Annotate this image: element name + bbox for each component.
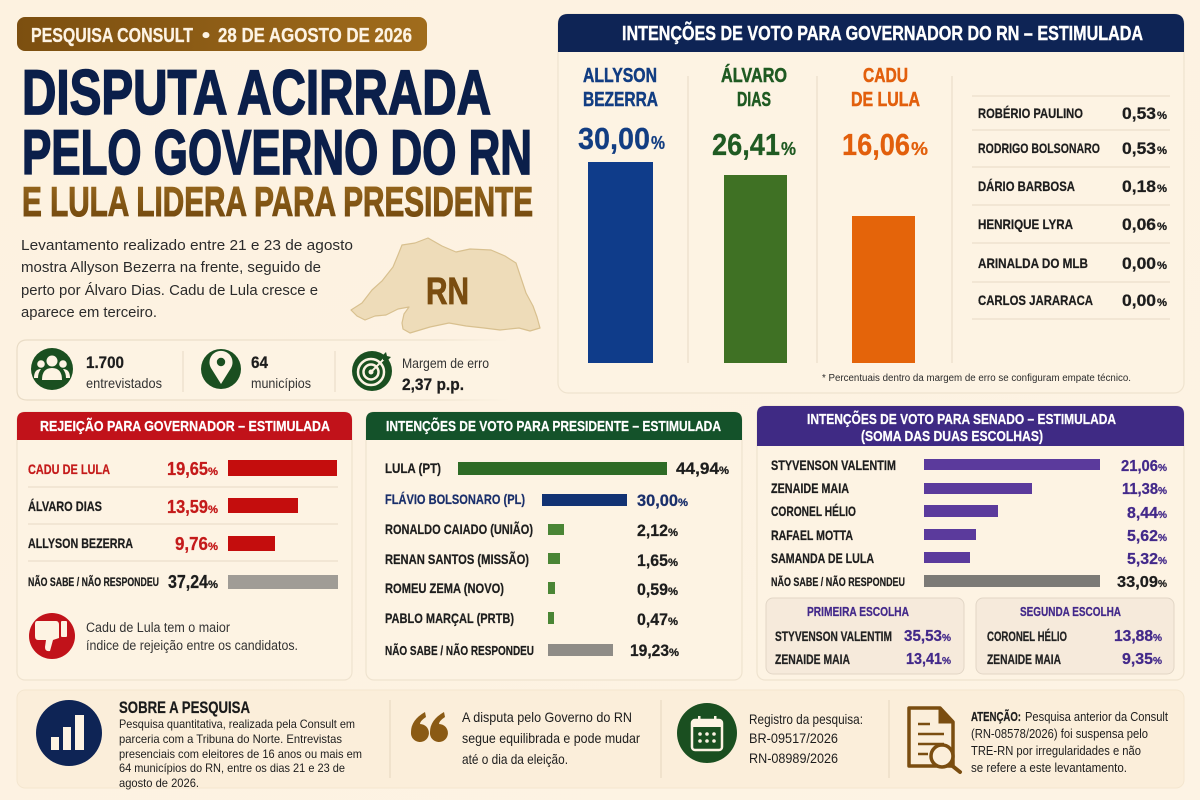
other candidates list: HENRIQUE LYRA (978, 216, 1073, 232)
heading (17, 412, 352, 440)
candidate: Allyson Bezerra: % (651, 133, 665, 153)
row: Allyson Bezerra: ALLYSON BEZERRA (28, 535, 133, 551)
intro text: mostra Allyson Bezerra na frente, seguido de (21, 259, 321, 276)
other candidates list: % (1157, 183, 1167, 195)
row: Flavio Bolsonaro: % (678, 497, 688, 509)
row: Rafael Motta: RAFAEL MOTTA (771, 527, 853, 543)
candidate: Cadu de Lula: CADU (863, 65, 908, 87)
card: second choice: 13,88 (1114, 628, 1153, 645)
row: no answer: % (669, 647, 679, 659)
row: no answer: % (208, 579, 218, 591)
title: E LULA LIDERA PARA PRESIDENTE (22, 178, 533, 225)
row: Samanda de Lula: SAMANDA DE LULA (771, 550, 874, 566)
intro text: perto por Álvaro Dias. Cadu de Lula cresce e (21, 282, 318, 299)
warning note: ATENÇÃO: (971, 709, 1021, 724)
card: second choice: 9,35 (1122, 651, 1153, 668)
other candidates list: % (1157, 297, 1167, 309)
row: Cadu de Lula: CADU DE LULA (28, 461, 110, 477)
icon: bar chart (36, 700, 102, 766)
row: Styvenson Valentim: 21,06 (1121, 458, 1158, 475)
row: Lula: % (719, 465, 729, 477)
card: first choice: PRIMEIRA ESCOLHA (807, 604, 909, 619)
row: Rafael Motta: 5,62 (1127, 528, 1158, 545)
card: second choice: CORONEL HÉLIO (987, 629, 1067, 644)
title: PELO GOVERNO DO RN (22, 118, 532, 188)
row: Zenaide Maia: ZENAIDE MAIA (771, 480, 849, 496)
quote: segue equilibrada e pode mudar (462, 730, 640, 746)
panel: rejection for governor (17, 412, 352, 680)
intro text: aparece em terceiro. (21, 304, 157, 321)
quote: A disputa pelo Governo do RN (462, 709, 632, 725)
footer panel (17, 690, 1184, 790)
row: no answer: 33,09 (1117, 574, 1158, 591)
card: first choice: STYVENSON VALENTIM (775, 629, 892, 644)
date badge: PESQUISA CONSULT (31, 25, 193, 47)
about the survey: 64 municípios do RN, entre os dias 21 e 23 de (119, 761, 345, 775)
row: no answer: NÃO SABE / NÃO RESPONDEU (771, 574, 905, 589)
row: no answer: 37,24 (168, 572, 208, 592)
row: Lula (385, 459, 729, 478)
card: first choice: % (942, 656, 951, 667)
date badge: 28 DE AGOSTO DE 2026 (218, 25, 412, 47)
row: Lula: LULA (PT) (385, 460, 441, 476)
row: Alvaro Dias (28, 497, 298, 517)
candidate: Alvaro Dias: ÁLVARO (721, 64, 787, 87)
card: second choice: ZENAIDE MAIA (987, 652, 1061, 667)
row: Romeu Zema: % (668, 586, 678, 598)
row: Renan Santos: % (668, 557, 678, 569)
heading (757, 406, 1184, 446)
stat: municipalities: 64 (251, 353, 268, 372)
row: Alvaro Dias: % (208, 504, 218, 516)
row: Pablo Marcal: % (668, 616, 678, 628)
row: Rafael Motta (771, 527, 1167, 545)
icon: target (352, 351, 392, 391)
row: Cadu de Lula: % (208, 466, 218, 478)
heading: INTENÇÕES DE VOTO PARA PRESIDENTE – ESTIMULADA (386, 417, 721, 435)
warning note: TRE-RN por irregularidades e não (971, 744, 1141, 758)
row: Samanda de Lula: 5,32 (1127, 551, 1158, 568)
quote (462, 709, 640, 767)
row: Alvaro Dias: ÁLVARO DIAS (28, 498, 102, 514)
panel: senate voting intentions (757, 406, 1184, 680)
candidate: Cadu de Lula: % (911, 139, 928, 159)
card: second choice: % (1153, 633, 1162, 644)
row: Ronaldo Caiado: 2,12 (637, 521, 668, 540)
row: Pablo Marcal: 0,47 (637, 610, 668, 629)
row: Coronel Helio: % (1158, 510, 1167, 521)
row: Renan Santos (385, 550, 678, 570)
title: DISPUTA ACIRRADA (22, 58, 491, 128)
card: first choice: 35,53 (904, 628, 942, 645)
row: Flavio Bolsonaro: FLÁVIO BOLSONARO (PL) (385, 491, 525, 507)
map: Rio Grande do Norte: RN (426, 271, 469, 313)
row: Flavio Bolsonaro: 30,00 (637, 491, 678, 510)
other candidates list: 0,00 (1122, 291, 1156, 310)
row: no answer: % (1158, 579, 1167, 590)
row: Pablo Marcal: PABLO MARÇAL (PRTB) (385, 610, 514, 626)
candidate: Alvaro Dias (712, 64, 796, 363)
row: no answer: NÃO SABE / NÃO RESPONDEU (28, 576, 159, 589)
row: Renan Santos: RENAN SANTOS (MISSÃO) (385, 550, 529, 567)
candidate: Alvaro Dias: % (781, 139, 796, 159)
candidate: Alvaro Dias: 26,41 (712, 127, 780, 162)
row: Styvenson Valentim: % (1158, 463, 1167, 474)
other candidates list: DÁRIO BARBOSA (978, 178, 1075, 194)
other candidates list: 0,18 (1122, 177, 1156, 196)
candidate: Cadu de Lula: 16,06 (842, 127, 910, 162)
date badge: • (202, 25, 210, 47)
candidate: Allyson Bezerra: 30,00 (578, 121, 650, 156)
warning note: (RN-08578/2026) foi suspensa pelo (971, 727, 1148, 741)
card: second choice: SEGUNDA ESCOLHA (1020, 604, 1121, 619)
about the survey: SOBRE A PESQUISA (119, 698, 250, 717)
stat: municipalities (251, 353, 311, 391)
card: second choice: % (1153, 656, 1162, 667)
other candidates list: ROBÉRIO PAULINO (978, 105, 1083, 121)
rejection note (86, 620, 298, 653)
row: Coronel Helio (771, 503, 1167, 522)
about the survey (119, 698, 362, 790)
icon: thumbs down (29, 613, 75, 659)
candidate: Allyson Bezerra: BEZERRA (583, 89, 658, 111)
row: Alvaro Dias: 13,59 (167, 497, 208, 517)
other candidates list: CARLOS JARARACA (978, 292, 1093, 308)
row: Cadu de Lula: 19,65 (167, 459, 208, 479)
heading (366, 412, 742, 440)
about the survey: parceria com a Tribuna do Norte. Entrevistas (119, 732, 342, 746)
icon: calendar (677, 703, 737, 763)
icon: quotation mark (411, 712, 448, 742)
row: Lula: 44,94 (676, 459, 720, 478)
intro text (21, 237, 353, 321)
heading: REJEIÇÃO PARA GOVERNADOR – ESTIMULADA (40, 417, 330, 435)
warning note: se refere a este levantamento. (971, 761, 1127, 775)
stat: interviewees: entrevistados (86, 375, 162, 391)
heading: (SOMA DAS DUAS ESCOLHAS) (861, 428, 1043, 445)
icon: document with magnifier (909, 708, 960, 772)
candidate: Cadu de Lula: DE LULA (851, 89, 920, 111)
other candidates list: % (1157, 110, 1167, 122)
card: first choice (766, 598, 964, 674)
about the survey: agosto de 2026. (119, 776, 199, 790)
title (22, 58, 533, 225)
rejection note: Cadu de Lula tem o maior (86, 620, 230, 635)
row: Allyson Bezerra: 9,76 (175, 534, 208, 554)
quote: até o dia da eleição. (462, 751, 568, 767)
stat: interviewees: 1.700 (86, 353, 124, 372)
stat: municipalities: municípios (251, 375, 311, 391)
survey registration: BR-09517/2026 (749, 730, 838, 746)
other candidates list: RODRIGO BOLSONARO (978, 140, 1100, 156)
candidate: Allyson Bezerra (578, 65, 665, 363)
row: Zenaide Maia (771, 480, 1167, 498)
row: Allyson Bezerra (28, 534, 275, 554)
row: Ronaldo Caiado (385, 520, 678, 540)
other candidates list: 0,00 (1122, 254, 1156, 273)
icon: people (31, 348, 73, 390)
footnote: * Percentuais dentro da margem de erro se configuram empate técnico. (822, 373, 1131, 384)
icon: map pin (201, 349, 241, 389)
candidate: Cadu de Lula (842, 65, 928, 363)
row: Coronel Helio: 8,44 (1127, 505, 1158, 522)
other candidates list (972, 96, 1170, 319)
row: no answer (385, 641, 679, 660)
row: Cadu de Lula (28, 459, 337, 479)
stat: margin of error: Margem de erro (402, 355, 489, 371)
intro text: Levantamento realizado entre 21 e 23 de agosto (21, 237, 353, 254)
row: Samanda de Lula: % (1158, 556, 1167, 567)
about the survey: presenciais com eleitores de 16 anos ou mais em (119, 747, 362, 761)
row: Zenaide Maia: 11,38 (1122, 481, 1158, 498)
row: Styvenson Valentim (771, 457, 1167, 475)
about the survey: Pesquisa quantitativa, realizada pela Consult em (119, 717, 355, 731)
survey registration (749, 711, 863, 766)
row: Pablo Marcal (385, 610, 678, 629)
candidate: Alvaro Dias: DIAS (737, 89, 771, 111)
row: Allyson Bezerra: % (208, 541, 218, 553)
row: Flavio Bolsonaro (385, 491, 688, 510)
row: Romeu Zema: 0,59 (637, 580, 668, 599)
map: Rio Grande do Norte (351, 238, 540, 333)
panel: president voting intentions (366, 412, 742, 680)
row: Ronaldo Caiado: % (668, 527, 678, 539)
row: Zenaide Maia: % (1158, 486, 1167, 497)
other candidates list: 0,06 (1122, 215, 1156, 234)
row: no answer: NÃO SABE / NÃO RESPONDEU (385, 643, 534, 658)
card: second choice (976, 598, 1174, 674)
row: no answer (771, 574, 1167, 591)
stat: margin of error (402, 355, 489, 394)
row: Romeu Zema: ROMEU ZEMA (NOVO) (385, 580, 504, 596)
rejection note: índice de rejeição entre os candidatos. (86, 638, 298, 653)
row: no answer (28, 572, 338, 592)
row: Romeu Zema (385, 580, 678, 599)
other candidates list: % (1157, 145, 1167, 157)
other candidates list: % (1157, 221, 1167, 233)
row: Ronaldo Caiado: RONALDO CAIADO (UNIÃO) (385, 520, 533, 537)
heading (558, 14, 1184, 52)
warning note (971, 709, 1168, 775)
other candidates list: 0,53 (1122, 104, 1156, 123)
row: no answer: 19,23 (630, 641, 669, 660)
card: first choice: % (942, 633, 951, 644)
row: Samanda de Lula (771, 550, 1167, 568)
survey registration: Registro da pesquisa: (749, 711, 863, 727)
heading: INTENÇÕES DE VOTO PARA SENADO – ESTIMULADA (807, 410, 1116, 428)
row: Styvenson Valentim: STYVENSON VALENTIM (771, 457, 896, 473)
stat: margin of error: 2,37 p.p. (402, 375, 464, 394)
row: Rafael Motta: % (1158, 533, 1167, 544)
row: Renan Santos: 1,65 (637, 551, 668, 570)
stat: interviewees (86, 353, 162, 391)
panel: governor voting intentions (558, 14, 1184, 393)
warning note: Pesquisa anterior da Consult (1025, 710, 1168, 724)
candidate: Allyson Bezerra: ALLYSON (583, 65, 657, 87)
date badge (17, 17, 427, 51)
card: first choice: ZENAIDE MAIA (775, 652, 850, 667)
stats strip (17, 340, 510, 400)
other candidates list: ARINALDA DO MLB (978, 255, 1088, 271)
row: Coronel Helio: CORONEL HÉLIO (771, 503, 856, 519)
card: first choice: 13,41 (906, 651, 942, 668)
other candidates list: 0,53 (1122, 139, 1156, 158)
survey registration: RN-08989/2026 (749, 750, 838, 766)
other candidates list: % (1157, 260, 1167, 272)
